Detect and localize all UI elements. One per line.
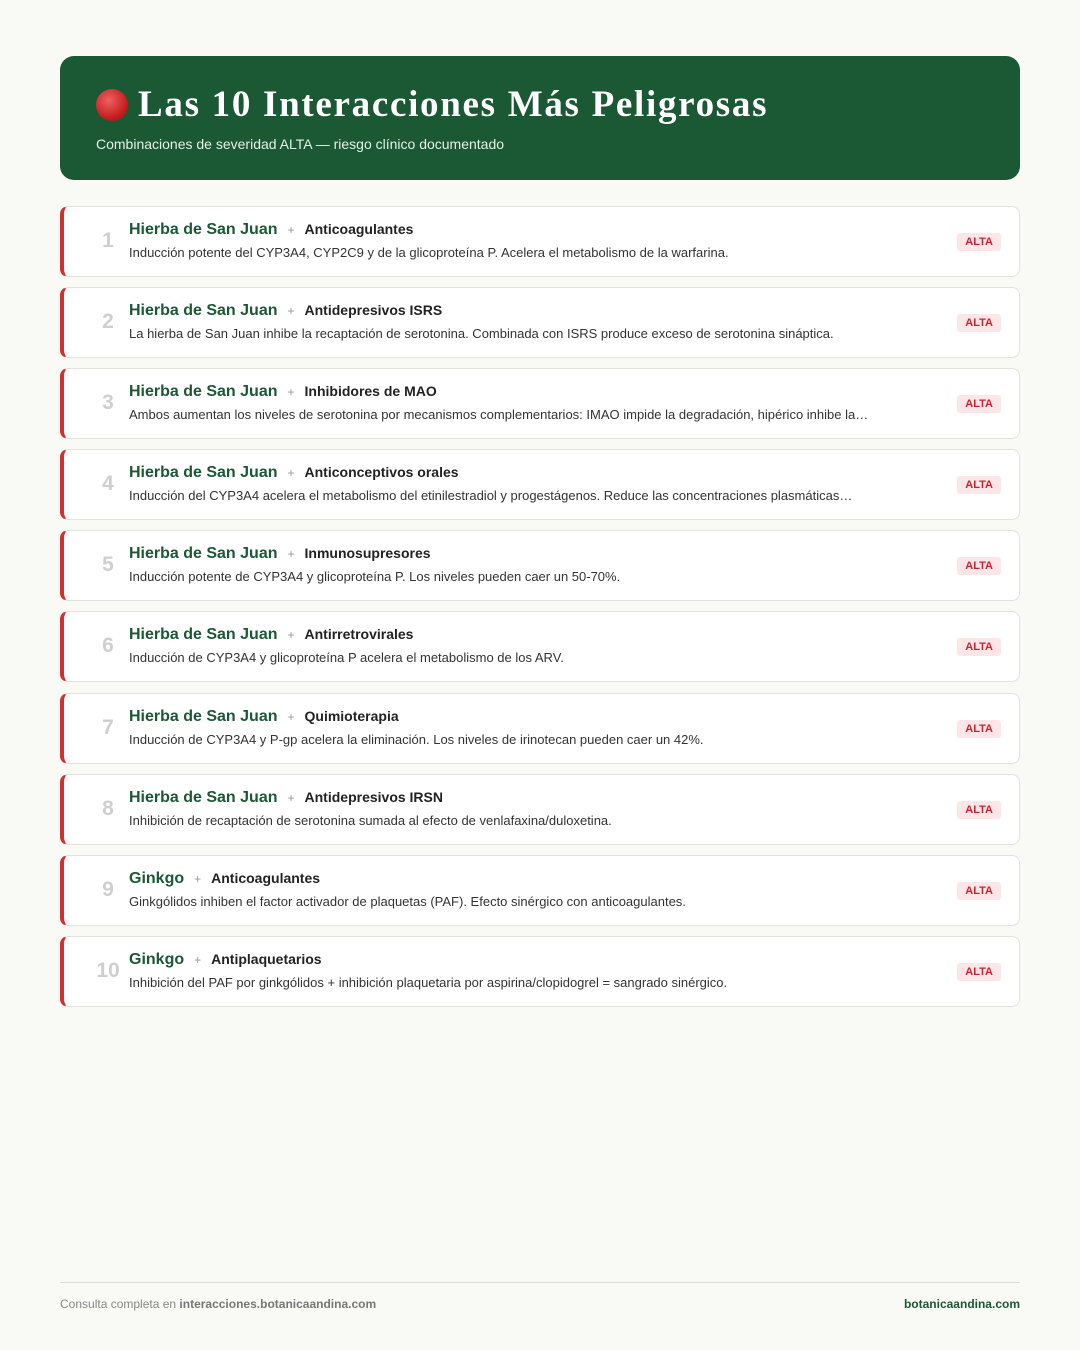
- card 3: 3: [102, 391, 114, 414]
- card 4: ALTA: [965, 479, 993, 491]
- card 10: Ginkgo + Antiplaquetarios: [129, 951, 322, 968]
- card 5: Inducción potente de CYP3A4 y glicoproteína P. Los niveles pueden caer un 50-70%.: [129, 569, 620, 584]
- card 3: Ambos aumentan los niveles de serotonina por mecanismos complementarios: IMAO impide la degradación, hipérico inhibe la…: [129, 407, 868, 422]
- footer: botanicaandina.com: [904, 1297, 1020, 1311]
- card 5: [60, 530, 1020, 601]
- card 3: [60, 368, 1020, 439]
- card 2: 2: [102, 310, 114, 333]
- footer: Consulta completa en interacciones.botanicaandina.com: [60, 1297, 376, 1311]
- card 5: Hierba de San Juan + Inmunosupresores: [129, 545, 431, 562]
- card 3: ALTA: [965, 398, 993, 410]
- card 2: ALTA: [965, 317, 993, 329]
- card 2: Hierba de San Juan + Antidepresivos ISRS: [129, 302, 442, 319]
- title: Las 10 Interacciones Más Peligrosas: [138, 84, 768, 125]
- card 4: Inducción del CYP3A4 acelera el metabolismo del etinilestradiol y progestágenos. Reduce las concentraciones plasmáticas…: [129, 488, 852, 503]
- card 3: Hierba de San Juan + Inhibidores de MAO: [129, 383, 437, 400]
- card 10: 10: [96, 959, 120, 982]
- card 4: [60, 449, 1020, 520]
- card 8: ALTA: [965, 804, 993, 816]
- card 4: 4: [102, 472, 114, 495]
- footer: [60, 1282, 1020, 1311]
- card 8: [60, 774, 1020, 845]
- card 10: [60, 936, 1020, 1007]
- card 1: [60, 206, 1020, 277]
- card 10: Inhibición del PAF por ginkgólidos + inhibición plaquetaria por aspirina/clopidogrel = sangrado sinérgico.: [129, 975, 727, 990]
- card 4: Hierba de San Juan + Anticonceptivos orales: [129, 464, 459, 481]
- card 10: ALTA: [965, 966, 993, 978]
- card 1: 1: [102, 229, 114, 252]
- card 7: Hierba de San Juan + Quimioterapia: [129, 708, 399, 725]
- card 6: [60, 611, 1020, 682]
- card 9: 9: [102, 878, 114, 901]
- card 8: Hierba de San Juan + Antidepresivos IRSN: [129, 789, 443, 806]
- card 2: [60, 287, 1020, 358]
- card 9: Ginkgo + Anticoagulantes: [129, 870, 320, 887]
- card 6: ALTA: [965, 641, 993, 653]
- card 7: ALTA: [965, 723, 993, 735]
- card 1: Inducción potente del CYP3A4, CYP2C9 y de la glicoproteína P. Acelera el metabolismo de la warfarina.: [129, 245, 729, 260]
- subtitle: Combinaciones de severidad ALTA — riesgo clínico documentado: [96, 136, 504, 152]
- card 7: 7: [102, 716, 114, 739]
- card 7: [60, 693, 1020, 764]
- card 6: 6: [102, 634, 114, 657]
- header: [60, 56, 1020, 180]
- card 5: 5: [102, 553, 114, 576]
- card 9: [60, 855, 1020, 926]
- card 5: ALTA: [965, 560, 993, 572]
- card 6: Inducción de CYP3A4 y glicoproteína P acelera el metabolismo de los ARV.: [129, 650, 564, 665]
- card 2: La hierba de San Juan inhibe la recaptación de serotonina. Combinada con ISRS produce exceso de serotonina sináptica.: [129, 326, 834, 341]
- card 8: Inhibición de recaptación de serotonina sumada al efecto de venlafaxina/duloxetina.: [129, 813, 612, 828]
- card 8: 8: [102, 797, 114, 820]
- card 1: Hierba de San Juan + Anticoagulantes: [129, 221, 413, 238]
- card 9: Ginkgólidos inhiben el factor activador de plaquetas (PAF). Efecto sinérgico con anticoagulantes.: [129, 894, 686, 909]
- card 9: ALTA: [965, 885, 993, 897]
- card 7: Inducción de CYP3A4 y P-gp acelera la eliminación. Los niveles de irinotecan pueden caer un 42%.: [129, 732, 704, 747]
- card 6: Hierba de San Juan + Antirretrovirales: [129, 626, 413, 643]
- card 1: ALTA: [965, 236, 993, 248]
